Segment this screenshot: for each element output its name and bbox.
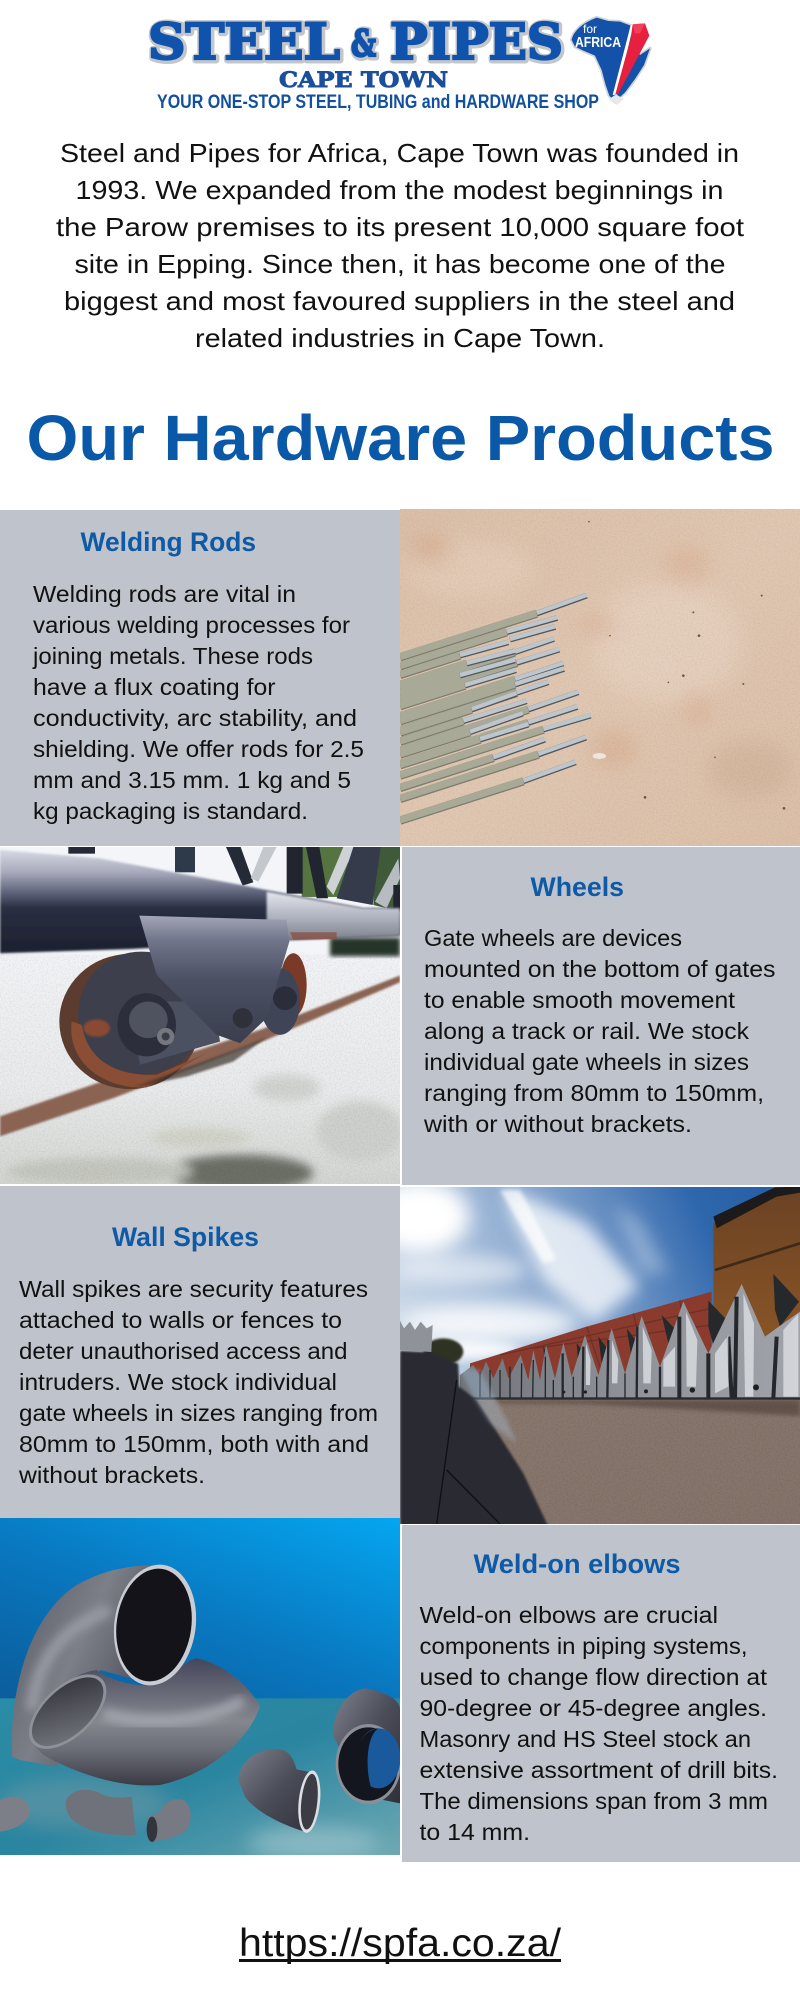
panel: weld-on elbows <box>402 1525 800 1862</box>
text block: weld-on elbows: components in piping systems, <box>420 1633 748 1659</box>
heading: wall spikes: Wall Spikes <box>112 1222 259 1252</box>
text block: wheels: with or without brackets. <box>423 1111 692 1137</box>
text block: wheels: ranging from 80mm to 150mm, <box>424 1080 764 1106</box>
text block: wall spikes: attached to walls or fences to <box>19 1307 342 1333</box>
logo wordmark <box>148 12 564 92</box>
website link: https://spfa.co.za/ <box>239 1922 561 1965</box>
logo wordmark: CAPE TOWN <box>279 67 448 92</box>
image: wall spikes under blue sky <box>400 1187 800 1524</box>
text block: welding rods <box>32 581 364 824</box>
shrub <box>330 938 400 956</box>
panel: welding rods <box>0 510 400 846</box>
text block: weld-on elbows: The dimensions span from 3 mm <box>420 1788 768 1814</box>
rail <box>0 976 400 1136</box>
text block: welding rods: shielding. We offer rods for 2.5 <box>33 736 364 762</box>
large front elbow <box>32 1658 260 1785</box>
logo wordmark: & <box>351 23 376 65</box>
text block: wheels: to enable smooth movement <box>424 987 736 1013</box>
background gate bars <box>68 847 400 912</box>
middle elbow <box>238 1749 317 1833</box>
intro paragraph: biggest and most favoured suppliers in the steel and <box>64 286 735 316</box>
text block: wheels <box>423 925 776 1137</box>
text block: weld-on elbows: extensive assortment of drill bits. <box>420 1757 778 1783</box>
text block: wall spikes: without brackets. <box>18 1462 205 1488</box>
intro paragraph: the Parow premises to its present 10,000 square foot <box>56 212 745 242</box>
logo wordmark: PIPES <box>391 13 564 72</box>
logo: Steel & Pipes Cape Town <box>148 12 650 113</box>
image: welding rods on sand surface <box>400 509 800 846</box>
rods <box>400 595 591 821</box>
building <box>713 1187 800 1347</box>
speckles <box>588 521 785 810</box>
dark back spikes <box>543 1274 799 1372</box>
intro paragraph: site in Epping. Since then, it has become one of the <box>74 249 726 279</box>
logo icon: Africa map: AFRICA <box>575 35 621 51</box>
text block: weld-on elbows: used to change flow direction at <box>420 1664 768 1690</box>
text block: wheels: Gate wheels are devices <box>424 925 682 951</box>
heading: wheels: Wheels <box>530 872 624 902</box>
bracket <box>139 916 289 1043</box>
text block: wall spikes: 80mm to 150mm, both with and <box>19 1431 369 1457</box>
logo wordmark: PIPES <box>390 12 563 71</box>
text block: wall spikes <box>18 1276 378 1488</box>
heading: welding rods: Welding Rods <box>80 527 256 557</box>
intro paragraph: Steel and Pipes for Africa, Cape Town was founded in <box>60 138 739 168</box>
intro paragraph <box>56 138 745 353</box>
logo icon: Africa map <box>572 18 650 105</box>
logo wordmark: STEEL <box>149 13 341 72</box>
text block: wheels: along a track or rail. We stock <box>424 1018 750 1044</box>
roof <box>470 1292 712 1400</box>
text block: wall spikes: gate wheels in sizes ranging from <box>19 1400 378 1426</box>
spike strip <box>460 1284 800 1399</box>
intro paragraph: 1993. We expanded from the modest beginnings in <box>76 175 724 205</box>
text block: welding rods: kg packaging is standard. <box>33 798 308 824</box>
dark foreground shadow <box>423 1338 463 1365</box>
text block: welding rods: Welding rods are vital in <box>33 581 296 607</box>
text block: welding rods: various welding processes for <box>33 612 350 638</box>
logo wordmark: & <box>352 24 377 66</box>
far spikes <box>400 1321 433 1352</box>
title: Our Hardware Products <box>26 402 774 474</box>
wheel <box>280 953 307 1016</box>
text block: welding rods: mm and 3.15 mm. 1 kg and 5 <box>33 767 351 793</box>
logo icon: Africa map: for <box>583 22 597 36</box>
panel: wheels <box>402 847 800 1185</box>
wall <box>457 1396 800 1524</box>
text block: wall spikes: intruders. We stock individual <box>19 1369 337 1395</box>
small elbows <box>0 1797 30 1832</box>
text block: weld-on elbows: 90-degree or 45-degree angles. <box>420 1695 767 1721</box>
text block: welding rods: joining metals. These rods <box>32 643 313 669</box>
text block: weld-on elbows <box>420 1602 778 1845</box>
text block: wall spikes: Wall spikes are security features <box>19 1276 368 1302</box>
right elbow <box>333 1688 400 1803</box>
logo wordmark: STEEL <box>148 12 340 71</box>
text block: wheels: individual gate wheels in sizes <box>424 1049 749 1075</box>
logo tagline: YOUR ONE-STOP STEEL, TUBING and HARDWARE SHOP <box>157 91 599 113</box>
heading: weld-on elbows: Weld-on elbows <box>474 1549 680 1579</box>
image: steel weld-on elbows on blue <box>0 1518 400 1855</box>
intro paragraph: related industries in Cape Town. <box>195 323 605 353</box>
panel: wall spikes <box>0 1186 400 1518</box>
text block: weld-on elbows: Masonry and HS Steel stock an <box>420 1726 751 1752</box>
large upright elbow <box>12 1565 197 1767</box>
text block: weld-on elbows: Weld-on elbows are crucial <box>420 1602 718 1628</box>
image: gate wheel on rail <box>0 847 400 1184</box>
text block: wall spikes: deter unauthorised access and <box>19 1338 348 1364</box>
text block: welding rods: conductivity, arc stability, and <box>33 705 357 731</box>
text block: wheels: mounted on the bottom of gates <box>424 956 776 982</box>
text block: welding rods: have a flux coating for <box>33 674 276 700</box>
text block: weld-on elbows: to 14 mm. <box>420 1819 530 1845</box>
pipe <box>0 850 400 953</box>
